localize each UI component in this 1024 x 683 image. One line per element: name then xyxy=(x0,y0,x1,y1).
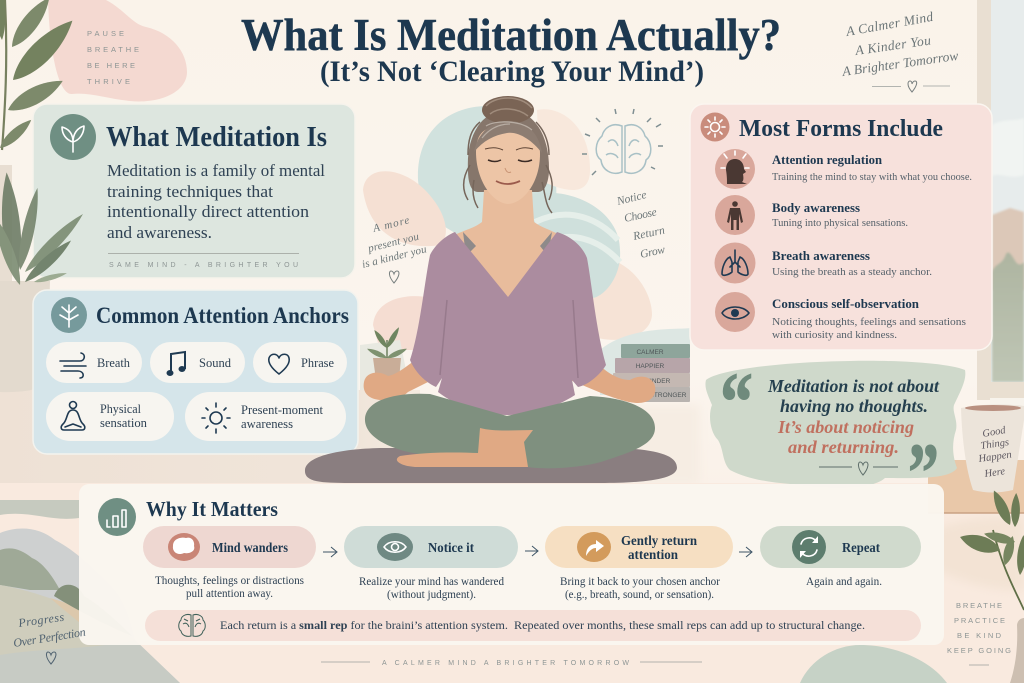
heading: Why It Matters xyxy=(146,497,278,521)
item: conscious self-observation: Noticing thoughts, feelings and sensations xyxy=(772,317,966,328)
handwritten note: a more present you: present you xyxy=(366,231,421,255)
callout band: Each return is a small rep for the braini’s attention system. Repeated over months, these small reps can add up to structural change. xyxy=(220,618,865,632)
text block: training techniques that xyxy=(107,182,273,201)
face xyxy=(476,126,540,204)
icon: leaf sprig xyxy=(50,114,96,160)
hair wisps xyxy=(464,122,552,213)
mug: Things xyxy=(980,437,1010,452)
handwritten note: top right xyxy=(840,9,959,92)
stacked books xyxy=(613,344,690,402)
heading: Common Attention Anchors xyxy=(96,303,349,328)
quote marks: “ xyxy=(720,356,753,449)
caption: pause breathe: THRIVE xyxy=(87,77,130,86)
caption: breathe practice xyxy=(947,601,1011,665)
caption: pause breathe: BREATHE xyxy=(87,45,139,54)
stacked books: KINDER xyxy=(646,378,671,385)
plant: bottom right xyxy=(958,488,1024,683)
item: attention regulation: Training the mind to stay with what you choose. xyxy=(772,172,972,183)
callout: quote: having no thoughts. xyxy=(780,396,928,416)
legs xyxy=(365,394,655,468)
item: body awareness xyxy=(715,195,908,235)
arms and hands xyxy=(364,358,442,400)
pill: sound: Sound xyxy=(199,355,231,370)
pill: phrase xyxy=(253,342,347,383)
step: notice it: Notice it xyxy=(428,540,474,555)
handwritten note: notice choose return grow: Return xyxy=(631,224,666,243)
pill: physical sensation: sensation xyxy=(100,415,147,430)
caption: breathe practice: BREATHE xyxy=(956,601,1002,610)
text block: Meditation is a family of mental xyxy=(107,161,325,180)
icon: brain xyxy=(179,614,205,636)
callout: quote: Meditation is not about xyxy=(767,376,940,396)
pill: present-moment awareness xyxy=(185,392,346,441)
handwritten note: a more present you: is a kinder you xyxy=(361,243,428,271)
panel: why it matters xyxy=(79,484,944,645)
step: notice it: Realize your mind has wandered xyxy=(359,574,504,588)
neck and chest xyxy=(448,190,565,302)
mug xyxy=(961,404,1024,492)
item: body awareness: Tuning into physical sensations. xyxy=(772,218,908,229)
plant: top left xyxy=(0,0,80,152)
callout band xyxy=(145,610,921,641)
pill: breath xyxy=(46,342,142,383)
handwritten note: top right: A Kinder You xyxy=(853,33,932,58)
icon: bars xyxy=(98,498,136,536)
title: (It’s Not ‘Clearing Your Mind’) xyxy=(320,55,704,88)
icon: sprig xyxy=(51,297,87,333)
stacked books: HAPPIER xyxy=(636,363,665,370)
item: attention regulation xyxy=(715,149,972,189)
step: gently return attention: attention xyxy=(628,547,678,562)
plant leaves: left pot xyxy=(0,172,87,287)
decorative pink blob: top left xyxy=(48,0,187,101)
step: repeat: Repeat xyxy=(842,540,880,555)
item: conscious self-observation: Conscious self-observation xyxy=(772,296,920,311)
pill: physical sensation: Physical xyxy=(100,401,141,416)
heading: Most Forms Include xyxy=(739,116,943,142)
soft shapes behind the figure xyxy=(360,106,690,395)
callout: quote: It’s about noticing xyxy=(777,417,914,437)
caption: breathe practice: PRACTICE xyxy=(954,616,1005,625)
step: mind wanders: pull attention away. xyxy=(186,586,273,600)
handwritten note: a more present you xyxy=(361,214,428,283)
pill: present-moment awareness: awareness xyxy=(241,416,293,431)
pill: phrase: Phrase xyxy=(301,355,334,370)
handwritten note: progress over perfection: Over Perfection xyxy=(12,625,87,650)
panel: what meditation is xyxy=(33,104,355,278)
arrow xyxy=(525,546,538,556)
mug: Good xyxy=(982,425,1007,440)
shirt xyxy=(410,232,606,415)
pill: breath: Breath xyxy=(97,355,130,370)
callout: quote: ” xyxy=(908,427,939,520)
item: attention regulation: Attention regulation xyxy=(772,152,883,167)
icon: brain with rays xyxy=(582,109,663,175)
item: breath awareness: Breath awareness xyxy=(772,248,870,263)
landscape wash: bottom left xyxy=(0,500,180,683)
caption: pause breathe xyxy=(87,29,139,86)
caption: breathe practice: BE KIND xyxy=(957,631,1002,640)
mug: Here xyxy=(983,466,1006,480)
callout: quote: and returning. xyxy=(788,437,899,457)
callout: quote xyxy=(705,356,965,520)
handwritten note: top right: A Calmer Mind xyxy=(844,9,934,39)
stacked books: STRONGER xyxy=(650,392,687,399)
item: conscious self-observation: with curiosity and kindness. xyxy=(772,330,897,341)
text block: intentionally direct attention xyxy=(107,202,309,221)
panel: common attention anchors xyxy=(33,290,358,454)
step: gently return attention: (e.g., breath, sound, or sensation). xyxy=(565,587,714,601)
handwritten note: a more present you: A more xyxy=(371,214,411,235)
step: gently return attention: Bring it back to your chosen anchor xyxy=(560,574,720,588)
item: breath awareness xyxy=(714,242,932,284)
icon: sun xyxy=(700,112,730,142)
brush stroke xyxy=(705,361,965,488)
blob: bottom right xyxy=(800,645,947,683)
title: What Is Meditation Actually? xyxy=(241,10,781,60)
pill: sound xyxy=(150,342,245,383)
handwritten note: progress over perfection: Progress xyxy=(16,610,65,630)
step: notice it: (without judgment). xyxy=(387,587,476,601)
text block xyxy=(107,161,325,242)
mat xyxy=(305,448,677,483)
arrow xyxy=(323,547,337,557)
hair back xyxy=(468,110,549,192)
step: gently return attention: Gently return xyxy=(621,533,697,548)
handwritten note: notice choose return grow: Choose xyxy=(623,206,658,225)
panel: most forms include xyxy=(690,104,992,350)
item: breath awareness: Using the breath as a steady anchor. xyxy=(772,267,932,278)
feet xyxy=(397,428,533,467)
arrow xyxy=(739,547,752,557)
heading: What Meditation Is xyxy=(106,122,327,153)
step: gently return attention xyxy=(545,526,733,601)
meditating woman xyxy=(364,96,655,468)
small plant xyxy=(366,326,408,380)
caption: SAME MIND - A BRIGHTER YOU xyxy=(109,262,298,269)
pill: physical sensation xyxy=(46,392,174,441)
pot: left xyxy=(0,165,50,392)
step: notice it xyxy=(344,526,518,601)
window with landscape xyxy=(977,0,1024,412)
handwritten note: progress over perfection xyxy=(12,610,87,664)
title xyxy=(241,10,781,88)
step: repeat: Again and again. xyxy=(806,574,882,588)
step: mind wanders: Mind wanders xyxy=(212,540,288,555)
hair bun xyxy=(482,96,534,124)
text block: and awareness. xyxy=(107,223,212,242)
caption: pause breathe: BE HERE xyxy=(87,61,135,70)
caption: pause breathe: PAUSE xyxy=(87,29,124,38)
handwritten note: notice choose return grow xyxy=(615,189,666,261)
handwritten note: top right: A Brighter Tomorrow xyxy=(840,48,959,79)
handwritten note: notice choose return grow: Grow xyxy=(639,244,666,261)
step: repeat xyxy=(760,526,921,588)
item: body awareness: Body awareness xyxy=(772,200,860,215)
item: conscious self-observation xyxy=(715,292,966,341)
handwritten note: notice choose return grow: Notice xyxy=(615,189,648,208)
table xyxy=(928,460,1024,590)
step: mind wanders: Thoughts, feelings or distractions xyxy=(155,573,304,587)
footer caption: A CALMER MIND A BRIGHTER TOMORROW xyxy=(382,660,629,667)
mug: Happen xyxy=(977,449,1012,465)
step: mind wanders xyxy=(143,526,316,600)
caption: breathe practice: KEEP GOING xyxy=(947,646,1011,655)
pill: present-moment awareness: Present-moment xyxy=(241,402,323,417)
stacked books: CALMER xyxy=(636,349,664,356)
